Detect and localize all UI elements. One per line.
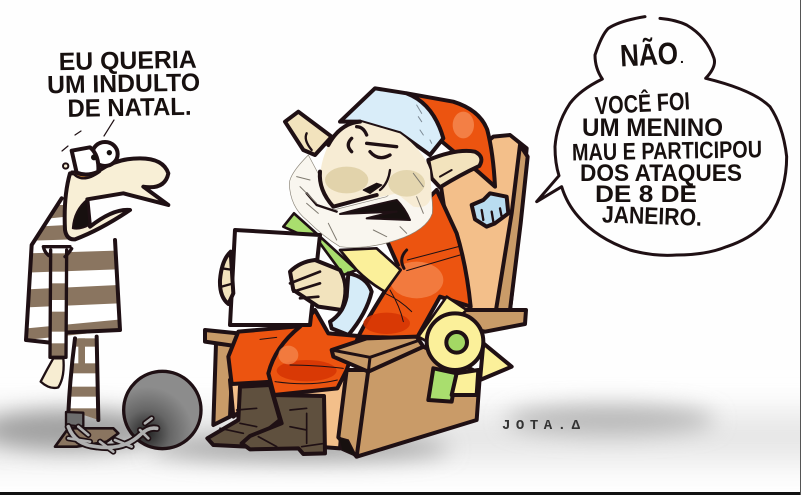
pompom <box>472 193 508 227</box>
right hand <box>290 260 345 310</box>
left ear <box>285 112 332 155</box>
left hand <box>220 252 233 304</box>
prisoner ear <box>63 163 68 169</box>
prisoner eye front <box>72 147 98 174</box>
speech text: santa: UM MENINO <box>582 114 723 142</box>
speech tick marks <box>62 120 114 151</box>
chair back <box>440 135 527 313</box>
closed eyes <box>348 127 397 158</box>
ground shadow <box>0 405 801 462</box>
rosette tails <box>428 343 512 402</box>
speech text: santa: NÃO <box>619 36 679 74</box>
cuff <box>330 273 372 335</box>
speech text: prisoner: EU QUERIA <box>58 46 197 76</box>
yellow sash <box>340 248 401 292</box>
speech text: santa: DE 8 DE <box>595 181 697 208</box>
speech text: santa: . <box>680 50 684 66</box>
prisoner <box>26 142 201 452</box>
moustache mark <box>363 183 382 193</box>
chair right armrest <box>463 310 526 332</box>
ball <box>124 371 201 449</box>
speech text: santa: VOCÊ FOI <box>594 85 691 120</box>
chair left leg <box>213 343 233 425</box>
hat brim <box>340 88 443 155</box>
prisoner head <box>63 142 168 239</box>
prisoner foot <box>55 428 118 447</box>
prisoner arm <box>43 247 72 357</box>
mouth <box>340 200 410 220</box>
glasses band <box>72 172 100 178</box>
head <box>320 122 432 208</box>
chair front armrest <box>332 337 423 372</box>
prisoner legs <box>67 337 100 420</box>
speech bubble: santa <box>537 17 787 255</box>
nose and brow lines <box>320 172 377 207</box>
hat <box>407 93 495 187</box>
green sash <box>283 213 357 275</box>
speech text: santa: MAU E PARTICIPOU <box>572 136 762 167</box>
document <box>230 230 320 325</box>
speech text: prisoner: UM INDULTO <box>47 69 200 99</box>
prisoner shirt <box>26 198 122 343</box>
right ear <box>428 151 481 187</box>
chair back side <box>496 145 528 310</box>
speech text: prisoner <box>46 46 201 123</box>
chair inner seat <box>230 373 347 448</box>
speech text: prisoner: DE NATAL. <box>67 93 192 123</box>
chain <box>68 418 157 452</box>
boots <box>207 385 325 454</box>
signature: JOTA.Δ <box>502 418 581 434</box>
chair left armrest <box>205 330 238 346</box>
santa legs <box>228 310 358 395</box>
chair base <box>338 347 480 457</box>
beard hatching <box>297 173 423 240</box>
speech text: santa: JANEIRO. <box>602 201 702 232</box>
speech text: santa: DOS ATAQUES <box>580 160 742 187</box>
rosette <box>418 297 483 370</box>
prisoner hand <box>41 358 64 388</box>
speech text: santa <box>572 36 762 232</box>
santa torso <box>358 190 471 338</box>
prisoner eye back <box>92 142 118 166</box>
beard <box>289 155 433 247</box>
santa and chair <box>205 88 528 457</box>
ankle cuff <box>66 412 83 427</box>
